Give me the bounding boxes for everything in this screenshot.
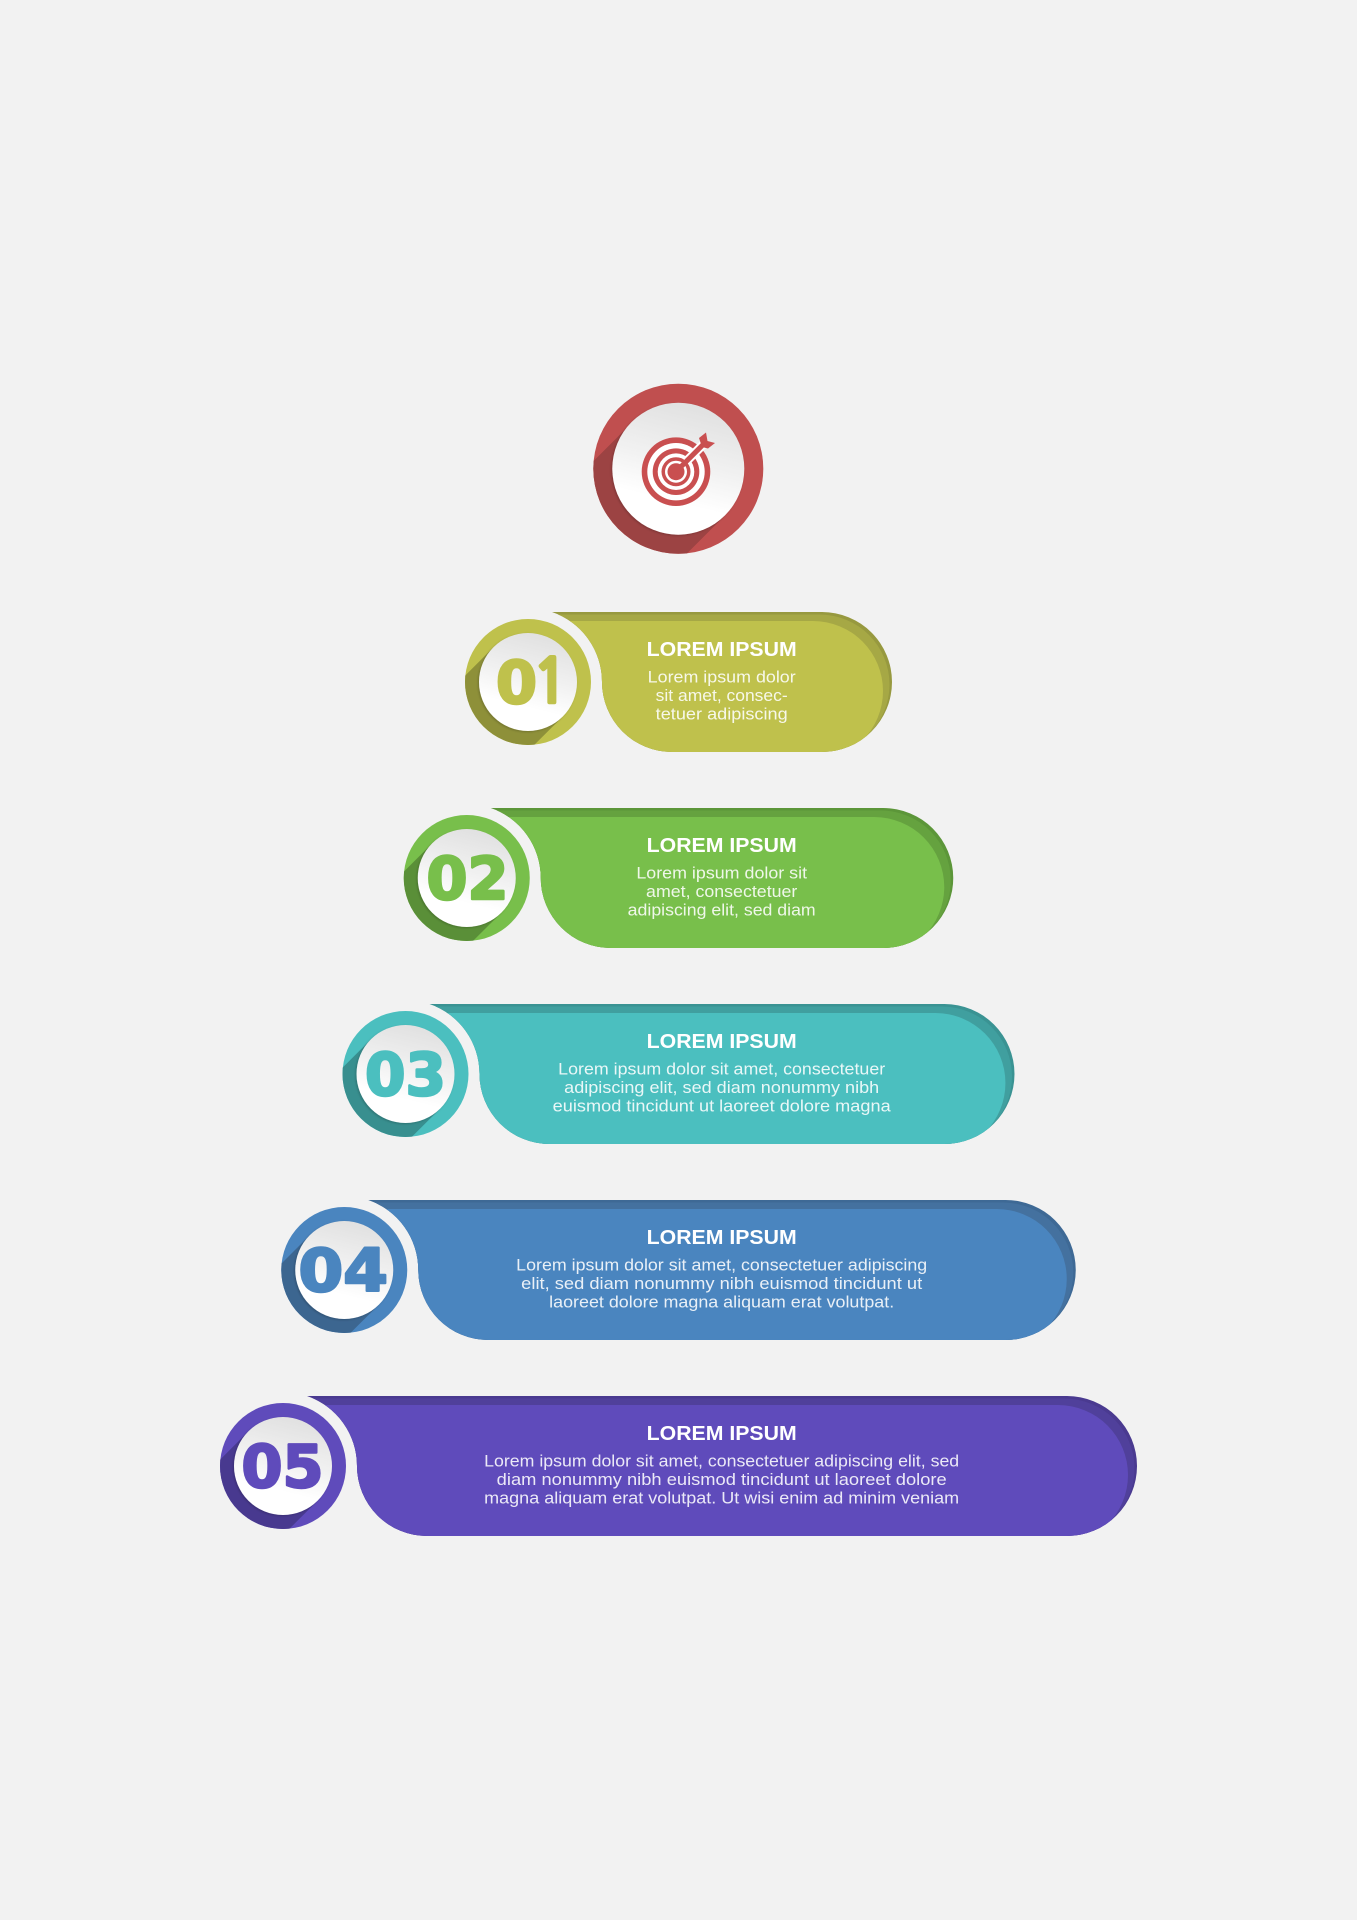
- panel: step 02 pill: adipiscing elit, sed diam: [628, 900, 816, 920]
- row 02: [404, 808, 954, 948]
- number badge 02: 02: [426, 844, 508, 913]
- number badge 05: 05: [242, 1432, 324, 1501]
- row 03: [342, 1004, 1014, 1144]
- row 01: [465, 612, 892, 752]
- number badge 04: 04: [298, 1236, 388, 1305]
- panel: step 01 pill: [552, 612, 892, 752]
- panel: step 03 pill: LOREM IPSUM: [647, 1031, 797, 1053]
- icon: target with arrow: [642, 432, 715, 506]
- panel: step 01 pill: Lorem ipsum dolor: [648, 668, 796, 686]
- number badge 05: [220, 1403, 346, 1529]
- panel: step 02 pill: LOREM IPSUM: [647, 835, 797, 857]
- goal badge with target icon: [593, 384, 764, 554]
- panel: step 01 pill: tetuer adipiscing: [656, 704, 788, 724]
- panel: step 04 pill: elit, sed diam nonummy nibh euismod tincidunt ut: [521, 1274, 922, 1293]
- number badge 04: [281, 1207, 408, 1333]
- panel: step 04 pill: laoreet dolore magna aliquam erat volutpat.: [549, 1292, 894, 1312]
- number badge 03: 03: [365, 1040, 446, 1109]
- panel: step 03 pill: Lorem ipsum dolor sit amet, consectetuer: [558, 1060, 886, 1078]
- panel: step 04 pill: Lorem ipsum dolor sit amet, consectetuer adipiscing: [516, 1256, 927, 1274]
- panel: step 05 pill: [283, 1396, 1137, 1545]
- panel: step 03 pill: adipiscing elit, sed diam nonummy nibh: [564, 1078, 879, 1097]
- panel: step 02 pill: [490, 808, 954, 948]
- panel: step 02 pill: amet, consectetuer: [646, 882, 798, 901]
- panel: step 04 pill: [344, 1200, 1076, 1349]
- panel: step 05 pill: Lorem ipsum dolor sit amet, consectetuer adipiscing elit, sed: [484, 1452, 959, 1470]
- row 05: [220, 1396, 1137, 1536]
- number badge 01: 1: [532, 653, 569, 713]
- number badge 03: [342, 1011, 468, 1137]
- panel: step 02 pill: Lorem ipsum dolor sit: [636, 864, 807, 882]
- panel: step 05 pill: LOREM IPSUM: [647, 1423, 797, 1445]
- panel: step 01 pill: sit amet, consec-: [656, 686, 788, 705]
- number badge 01: 0: [496, 648, 537, 717]
- panel: step 05 pill: magna aliquam erat volutpat. Ut wisi enim ad minim veniam: [484, 1488, 959, 1508]
- panel: step 03 pill: [406, 1004, 1014, 1153]
- panel: step 05 pill: diam nonummy nibh euismod tincidunt ut laoreet dolore: [497, 1470, 947, 1489]
- number badge 01: [465, 619, 591, 745]
- infographic canvas: [220, 384, 1137, 1536]
- panel: step 01 pill: LOREM IPSUM: [647, 639, 797, 661]
- panel: step 03 pill: euismod tincidunt ut laoreet dolore magna: [553, 1096, 891, 1116]
- number badge 02: [404, 815, 530, 941]
- panel: step 04 pill: LOREM IPSUM: [647, 1227, 797, 1249]
- row 04: [281, 1200, 1076, 1340]
